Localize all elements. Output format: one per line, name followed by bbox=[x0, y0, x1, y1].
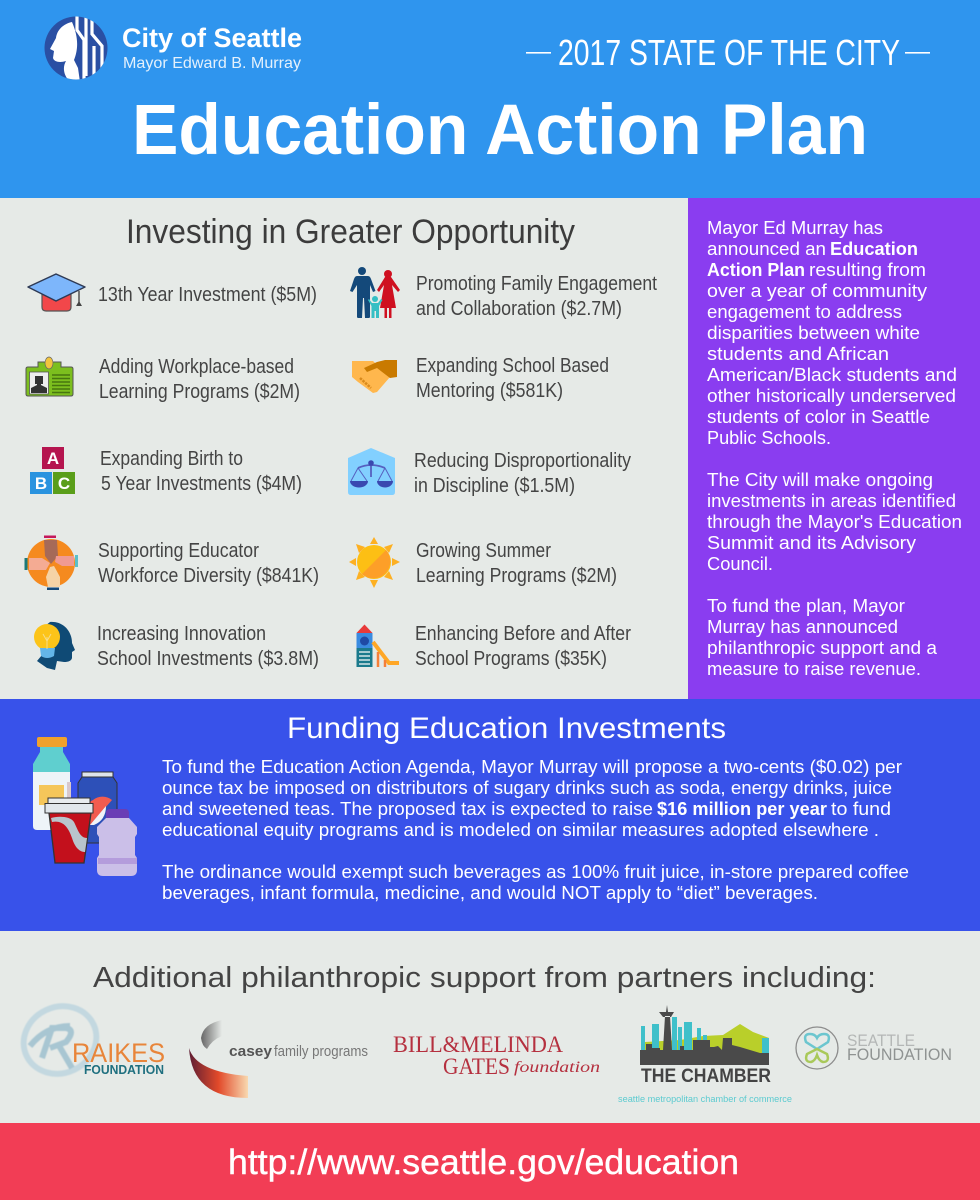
text block: city investments: Council. bbox=[707, 554, 773, 574]
logo: Seattle Foundation bbox=[796, 1027, 952, 1069]
logo: Casey Family Programs bbox=[189, 1020, 368, 1098]
item: workplace learning bbox=[26, 356, 300, 403]
logo: Bill & Melinda Gates Foundation: GATES bbox=[443, 1054, 510, 1079]
logo: Seattle Foundation: SEATTLE bbox=[847, 1031, 915, 1050]
item: educator diversity: Workforce Diversity ($841K) bbox=[98, 565, 319, 587]
text block: announcement: Education bbox=[830, 239, 918, 259]
panel: philanthropic partners bbox=[0, 931, 980, 1123]
text block: funding the plan: philanthropic support and a bbox=[707, 638, 938, 658]
text block: city investments bbox=[707, 470, 962, 574]
logo: Raikes Foundation: FOUNDATION bbox=[84, 1063, 164, 1077]
subtitle: 2017 State of the City: 2017 STATE OF THE CITY bbox=[558, 32, 900, 73]
item: family engagement: Promoting Family Engagement bbox=[416, 273, 657, 295]
text block: proposed tax: To fund the Education Action Agenda, Mayor Murray will propose a two-cents ($0.02) per bbox=[162, 757, 902, 777]
text block: funding the plan: To fund the plan, Mayor bbox=[707, 596, 905, 616]
text block: city investments: through the Mayor's Education bbox=[707, 512, 962, 532]
text block: proposed tax: $16 million per year bbox=[657, 799, 827, 819]
panel: funding education investments bbox=[0, 699, 980, 931]
panel: mayor's statement bbox=[688, 198, 980, 699]
item: school mentoring: Mentoring ($581K) bbox=[416, 380, 563, 402]
logo: Raikes Foundation: RAIKES bbox=[72, 1038, 165, 1068]
panel: investing in greater opportunity bbox=[0, 198, 688, 699]
item: birth to five: A bbox=[47, 449, 59, 468]
text block: proposed tax: to fund bbox=[831, 799, 891, 819]
item: educator diversity bbox=[24, 536, 319, 590]
text block: proposed tax: educational equity programs and is modeled on similar measures adopted elsewhere . bbox=[162, 820, 879, 840]
logo: The Chamber: THE CHAMBER bbox=[641, 1065, 771, 1087]
text block: announcement bbox=[707, 218, 957, 448]
item: school mentoring: Expanding School Based bbox=[416, 355, 609, 377]
title: Education Action Plan bbox=[132, 91, 868, 170]
icon: sugary drinks bbox=[33, 737, 137, 876]
logo: The Chamber: seattle metropolitan chamber of commerce bbox=[618, 1094, 792, 1104]
item: innovation schools bbox=[34, 622, 319, 670]
text block: proposed tax bbox=[162, 757, 902, 840]
text block: city investments: investments in areas identified bbox=[707, 491, 956, 511]
item: 13th year investment: 13th Year Investment ($5M) bbox=[98, 284, 317, 306]
item: workplace learning: Learning Programs ($2M) bbox=[99, 381, 300, 403]
text block: proposed tax: and sweetened teas. The proposed tax is expected to raise bbox=[162, 799, 653, 819]
logo: City of Seattle seal bbox=[44, 14, 108, 82]
item: birth to five bbox=[30, 447, 302, 495]
panel: footer url bbox=[0, 1123, 980, 1200]
text block: announcement: over a year of community bbox=[707, 281, 927, 301]
logo: Bill & Melinda Gates Foundation bbox=[393, 1032, 600, 1079]
item: birth to five: Expanding Birth to bbox=[100, 448, 243, 470]
item: birth to five: B bbox=[35, 474, 47, 493]
item: discipline scales: in Discipline ($1.5M) bbox=[414, 475, 575, 497]
text block: exemptions: The ordinance would exempt such beverages as 100% fruit juice, in-store prepared coffee bbox=[162, 862, 909, 882]
item: birth to five: 5 Year Investments ($4M) bbox=[101, 473, 302, 495]
text block: announcement: Action Plan bbox=[707, 260, 805, 280]
text block: announcement: announced an bbox=[707, 239, 826, 259]
logo wordmark: Mayor Edward B. Murray bbox=[123, 55, 301, 72]
text block: announcement: resulting from bbox=[809, 260, 926, 280]
logo: Bill & Melinda Gates Foundation: foundation bbox=[514, 1059, 600, 1076]
item: before and after school bbox=[356, 623, 631, 670]
text block: announcement: American/Black students and bbox=[707, 365, 957, 385]
logo: Raikes Foundation bbox=[13, 994, 165, 1086]
item: innovation schools: Increasing Innovation bbox=[97, 623, 266, 645]
item: summer learning: Learning Programs ($2M) bbox=[416, 565, 617, 587]
logo wordmark: City of Seattle bbox=[122, 23, 302, 53]
logo: Seattle Foundation: FOUNDATION bbox=[847, 1045, 952, 1064]
text block: announcement: Public Schools. bbox=[707, 428, 831, 448]
item: summer learning bbox=[349, 537, 617, 588]
panel: header bbox=[0, 0, 980, 198]
item: before and after school: Enhancing Before and After bbox=[415, 623, 631, 645]
text block: announcement: students and African bbox=[707, 344, 889, 364]
text block: announcement: other historically underserved bbox=[707, 386, 956, 406]
logo: Casey Family Programs: family programs bbox=[274, 1044, 368, 1060]
item: discipline scales bbox=[348, 448, 631, 497]
item: educator diversity: Supporting Educator bbox=[98, 540, 259, 562]
text block: funding the plan: Murray has announced bbox=[707, 617, 898, 637]
text block: announcement: disparities between white bbox=[707, 323, 920, 343]
item: summer learning: Growing Summer bbox=[416, 540, 551, 562]
item: workplace learning: Adding Workplace-based bbox=[99, 356, 294, 378]
item: discipline scales: Reducing Disproportionality bbox=[414, 450, 631, 472]
item: family engagement: and Collaboration ($2.7M) bbox=[416, 298, 622, 320]
item: before and after school: School Programs ($35K) bbox=[415, 648, 607, 670]
text block: city investments: Summit and its Advisory bbox=[707, 533, 916, 553]
text block: funding the plan bbox=[707, 596, 938, 679]
logo: The Chamber bbox=[618, 1005, 792, 1104]
item: birth to five: C bbox=[58, 474, 70, 493]
logo: Casey Family Programs: casey bbox=[229, 1044, 272, 1060]
logo wordmark bbox=[122, 23, 302, 72]
heading: partners: Additional philanthropic support from partners including: bbox=[93, 962, 876, 994]
text block: announcement: Mayor Ed Murray has bbox=[707, 218, 883, 238]
text block: announcement: students of color in Seattle bbox=[707, 407, 930, 427]
text block: exemptions: beverages, infant formula, medicine, and would NOT apply to “diet” beverages. bbox=[162, 883, 818, 903]
text block: funding the plan: measure to raise revenue. bbox=[707, 659, 921, 679]
text block: exemptions bbox=[162, 862, 909, 903]
link: seattle.gov/education: http://www.seattle.gov/education bbox=[228, 1143, 739, 1182]
item: innovation schools: School Investments ($3.8M) bbox=[97, 648, 319, 670]
item: 13th year investment bbox=[28, 274, 317, 311]
text block: city investments: The City will make ongoing bbox=[707, 470, 933, 490]
text block: announcement: engagement to address bbox=[707, 302, 902, 322]
logo: Bill & Melinda Gates Foundation: BILL&MELINDA bbox=[393, 1032, 563, 1057]
heading: funding: Funding Education Investments bbox=[287, 712, 726, 745]
item: family engagement bbox=[350, 267, 657, 320]
text block: proposed tax: ounce tax be imposed on distributors of sugary drinks such as soda, energy drinks, juice bbox=[162, 778, 892, 798]
heading: investing: Investing in Greater Opportunity bbox=[126, 213, 575, 251]
item: school mentoring bbox=[352, 355, 609, 402]
